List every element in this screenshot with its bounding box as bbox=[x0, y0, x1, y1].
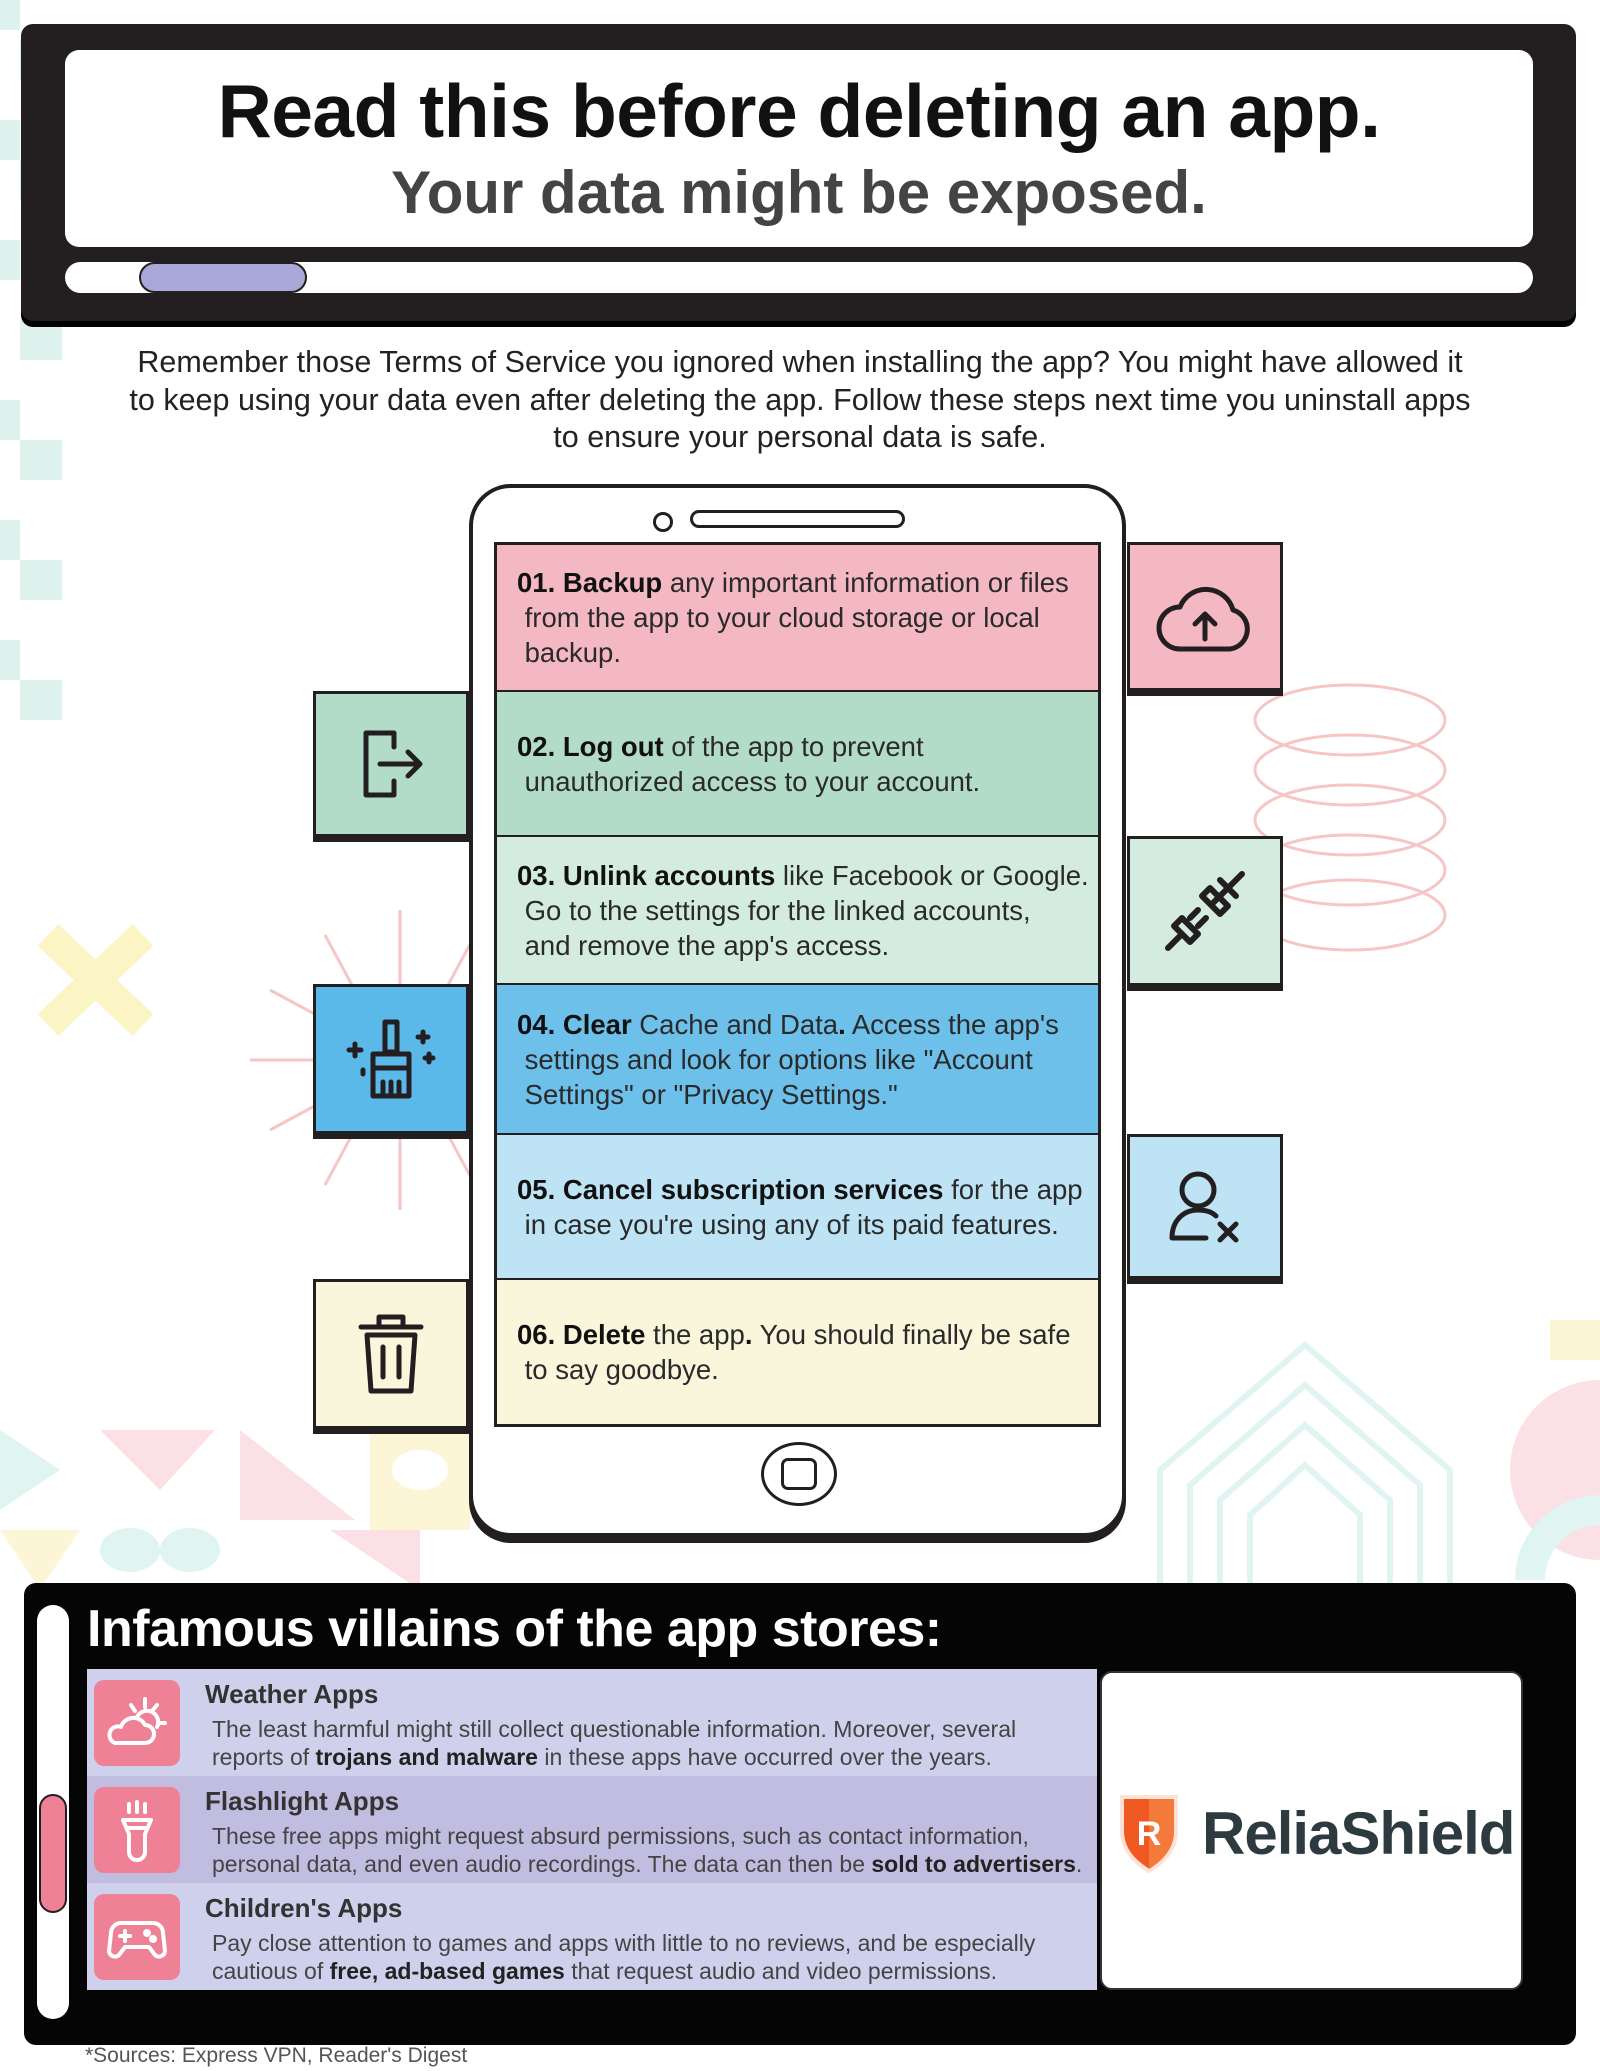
step 4: Settings" or "Privacy Settings." bbox=[525, 1078, 898, 1110]
step 6: to say goodbye. bbox=[525, 1354, 719, 1385]
step 4: 04. Clear Cache and Data. Access the app's bbox=[517, 1008, 1059, 1040]
step 1: from the app to your cloud storage or local bbox=[525, 602, 1040, 633]
background decoration: bottom shapes bbox=[0, 1320, 1600, 1583]
step 3: 03. Unlink accounts like Facebook or Google. bbox=[517, 860, 1089, 890]
step 5 bbox=[494, 1134, 1101, 1279]
background decoration: yellow X bbox=[38, 925, 153, 1035]
logo box bbox=[1100, 1671, 1523, 1990]
step 5: 05. Cancel subscription services for the app bbox=[517, 1174, 1083, 1204]
title box bbox=[65, 50, 1533, 247]
row: flashlight apps: These free apps might request absurd permissions, such as contact information, bbox=[212, 1823, 1029, 1849]
step 3: and remove the app's access. bbox=[525, 930, 889, 960]
intro text bbox=[129, 345, 1471, 454]
side tab: cloud upload bbox=[1127, 542, 1283, 696]
background decoration: left checkers bbox=[0, 0, 62, 720]
background decoration: sunburst bbox=[250, 910, 469, 1210]
row: children's apps: cautious of free, ad-based games that request audio and video permissions. bbox=[212, 1958, 997, 1984]
row: children's apps: Children's Apps bbox=[205, 1893, 402, 1923]
camera bbox=[653, 512, 673, 532]
step 2: unauthorized access to your account. bbox=[525, 766, 980, 796]
row: flashlight apps: Flashlight Apps bbox=[205, 1786, 399, 1816]
icon: gamepad bbox=[94, 1894, 180, 1980]
speaker bbox=[690, 510, 905, 528]
header panel bbox=[21, 24, 1576, 321]
intro text: to keep using your data even after deleting the app. Follow these steps next time you uninstall apps bbox=[129, 382, 1471, 416]
scrollbar bbox=[65, 262, 1533, 293]
row: flashlight apps bbox=[87, 1776, 1097, 1883]
row: children's apps: Pay close attention to games and apps with little to no reviews, and be especially bbox=[212, 1930, 1035, 1956]
phone bbox=[469, 484, 1126, 1537]
side tab: trash bbox=[313, 1279, 469, 1434]
step 4 bbox=[494, 984, 1101, 1134]
subtitle: Your data might be exposed. bbox=[391, 159, 1207, 226]
step 5: in case you're using any of its paid features. bbox=[525, 1208, 1059, 1240]
intro text: to ensure your personal data is safe. bbox=[553, 420, 1047, 454]
step 4: settings and look for options like "Account bbox=[525, 1044, 1033, 1074]
icon: weather bbox=[94, 1680, 180, 1766]
row: weather apps bbox=[87, 1669, 1097, 1776]
step 2: 02. Log out of the app to prevent bbox=[517, 730, 924, 762]
row: children's apps bbox=[87, 1883, 1097, 1990]
side tab: logout bbox=[313, 691, 469, 842]
row: weather apps: reports of trojans and malware in these apps have occurred over the years. bbox=[212, 1744, 992, 1770]
step 2 bbox=[494, 691, 1101, 836]
row: flashlight apps: personal data, and even audio recordings. The data can then be sold to advertisers. bbox=[212, 1851, 1082, 1877]
scrollbar left bbox=[37, 1605, 69, 2019]
logo: shield: R bbox=[1137, 1815, 1161, 1853]
logo: wordmark: ReliaShield bbox=[1202, 1800, 1514, 1867]
background decoration: pink rings right bbox=[1254, 684, 1446, 952]
step 6 bbox=[494, 1279, 1101, 1427]
home button bbox=[761, 1442, 837, 1506]
row: weather apps: Weather Apps bbox=[205, 1679, 378, 1709]
villains list bbox=[87, 1669, 1097, 1990]
logo: shield bbox=[1120, 1795, 1178, 1873]
step 1: 01. Backup any important information or files bbox=[517, 567, 1069, 598]
side tab: unplug bbox=[1127, 836, 1283, 991]
step 3: Go to the settings for the linked accounts, bbox=[525, 894, 1031, 926]
side tab: brush bbox=[313, 984, 469, 1139]
step 1 bbox=[494, 542, 1101, 691]
side tab: user remove bbox=[1127, 1134, 1283, 1284]
sources: *Sources: Express VPN, Reader's Digest bbox=[85, 2044, 467, 2067]
step 1: backup. bbox=[525, 637, 621, 668]
title: Read this before deleting an app. bbox=[218, 69, 1380, 153]
step 3 bbox=[494, 836, 1101, 984]
intro text: Remember those Terms of Service you ignored when installing the app? You might have allowed it bbox=[137, 345, 1463, 379]
villains panel bbox=[24, 1583, 1576, 2045]
icon: flashlight bbox=[94, 1787, 180, 1873]
villains heading: Infamous villains of the app stores: bbox=[87, 1600, 942, 1658]
row: weather apps: The least harmful might still collect questionable information. Moreover, several bbox=[212, 1716, 1016, 1742]
step 6: 06. Delete the app. You should finally be safe bbox=[517, 1319, 1070, 1350]
